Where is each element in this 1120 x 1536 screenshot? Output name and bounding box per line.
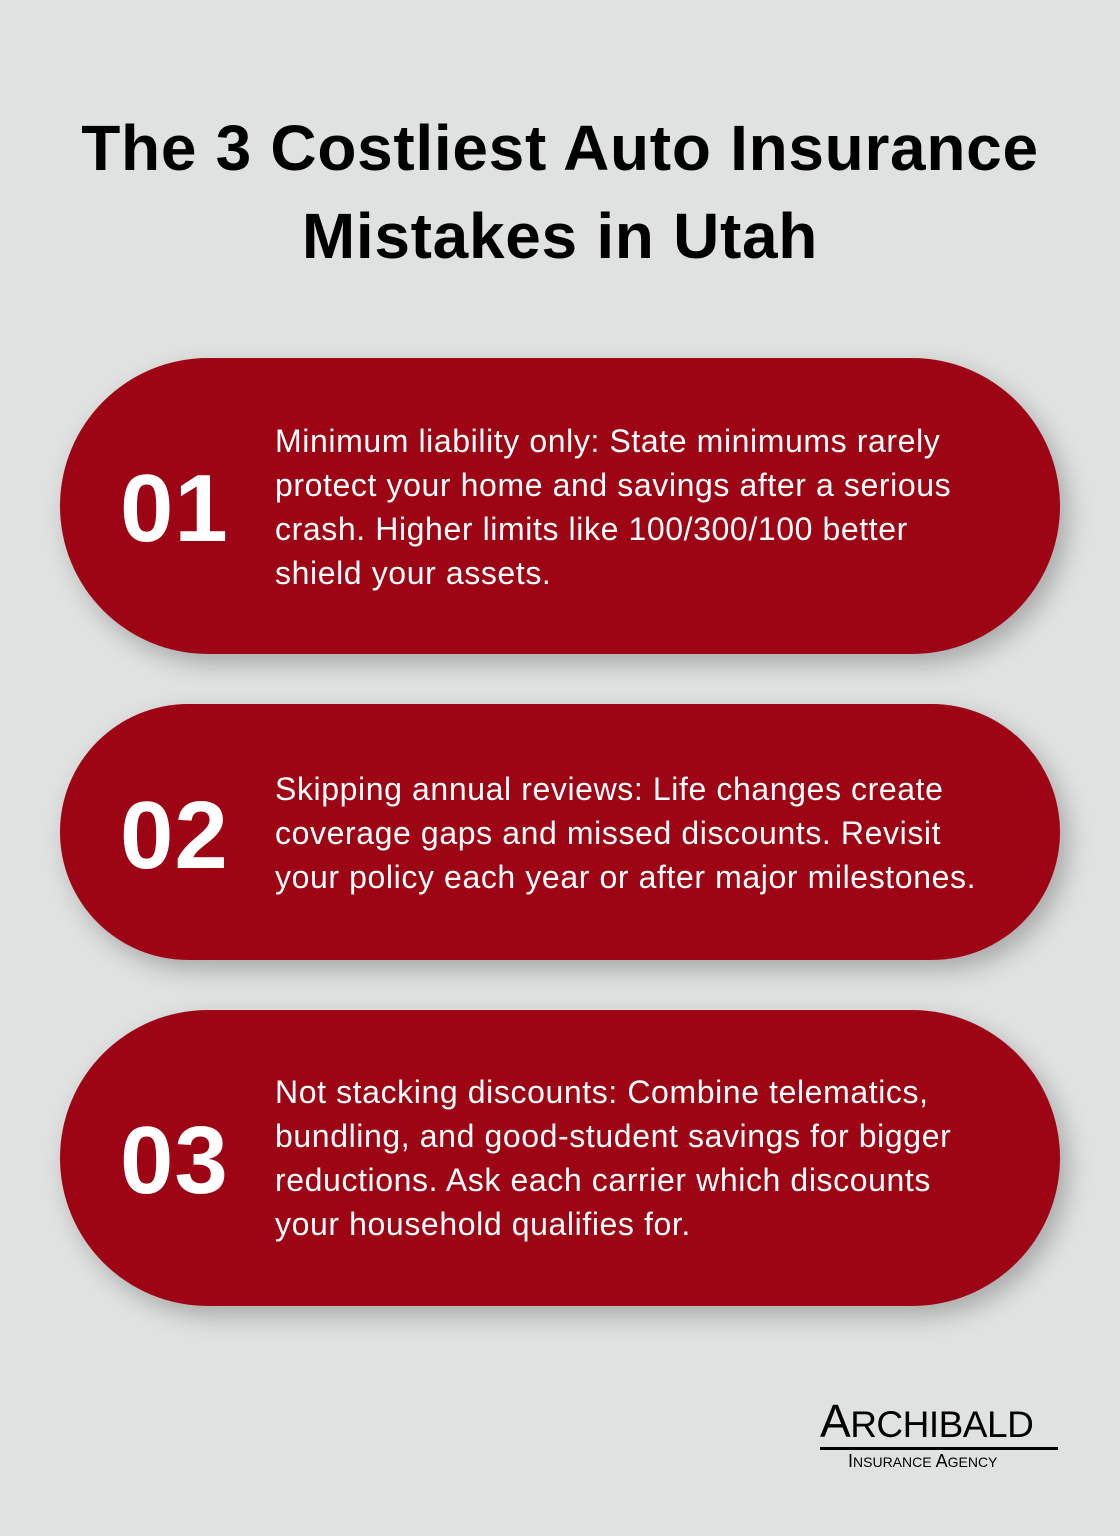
text 01: crash. Higher limits like 100/300/100 better: [275, 511, 908, 547]
panel: mistake 03: [60, 1010, 1060, 1306]
logo: INSURANCE AGENCY: [848, 1451, 997, 1471]
title: Mistakes in Utah: [302, 200, 818, 272]
text 01: [275, 423, 951, 591]
text 02: your policy each year or after major milestones.: [275, 859, 976, 895]
number 02: 02: [120, 782, 229, 889]
text 03: bundling, and good-student savings for bigger: [275, 1118, 951, 1154]
text 01: Minimum liability only: State minimums rarely: [275, 423, 940, 459]
text 03: [275, 1074, 951, 1242]
text 02: [275, 771, 976, 895]
text 02: coverage gaps and missed discounts. Revisit: [275, 815, 941, 851]
logo: [820, 1395, 1058, 1471]
text 01: shield your assets.: [275, 555, 551, 591]
title: [81, 112, 1039, 272]
title: The 3 Costliest Auto Insurance: [81, 112, 1039, 184]
text 03: reductions. Ask each carrier which discounts: [275, 1162, 931, 1198]
logo: ARCHIBALD: [820, 1395, 1033, 1447]
text 03: Not stacking discounts: Combine telematics,: [275, 1074, 929, 1110]
text 01: protect your home and savings after a serious: [275, 467, 951, 503]
panel: mistake 01: [60, 358, 1060, 654]
number 03: 03: [120, 1107, 229, 1214]
text 02: Skipping annual reviews: Life changes create: [275, 771, 944, 807]
text 03: your household qualifies for.: [275, 1206, 691, 1242]
panel: mistake 02: [60, 704, 1060, 960]
number 01: 01: [120, 455, 229, 562]
